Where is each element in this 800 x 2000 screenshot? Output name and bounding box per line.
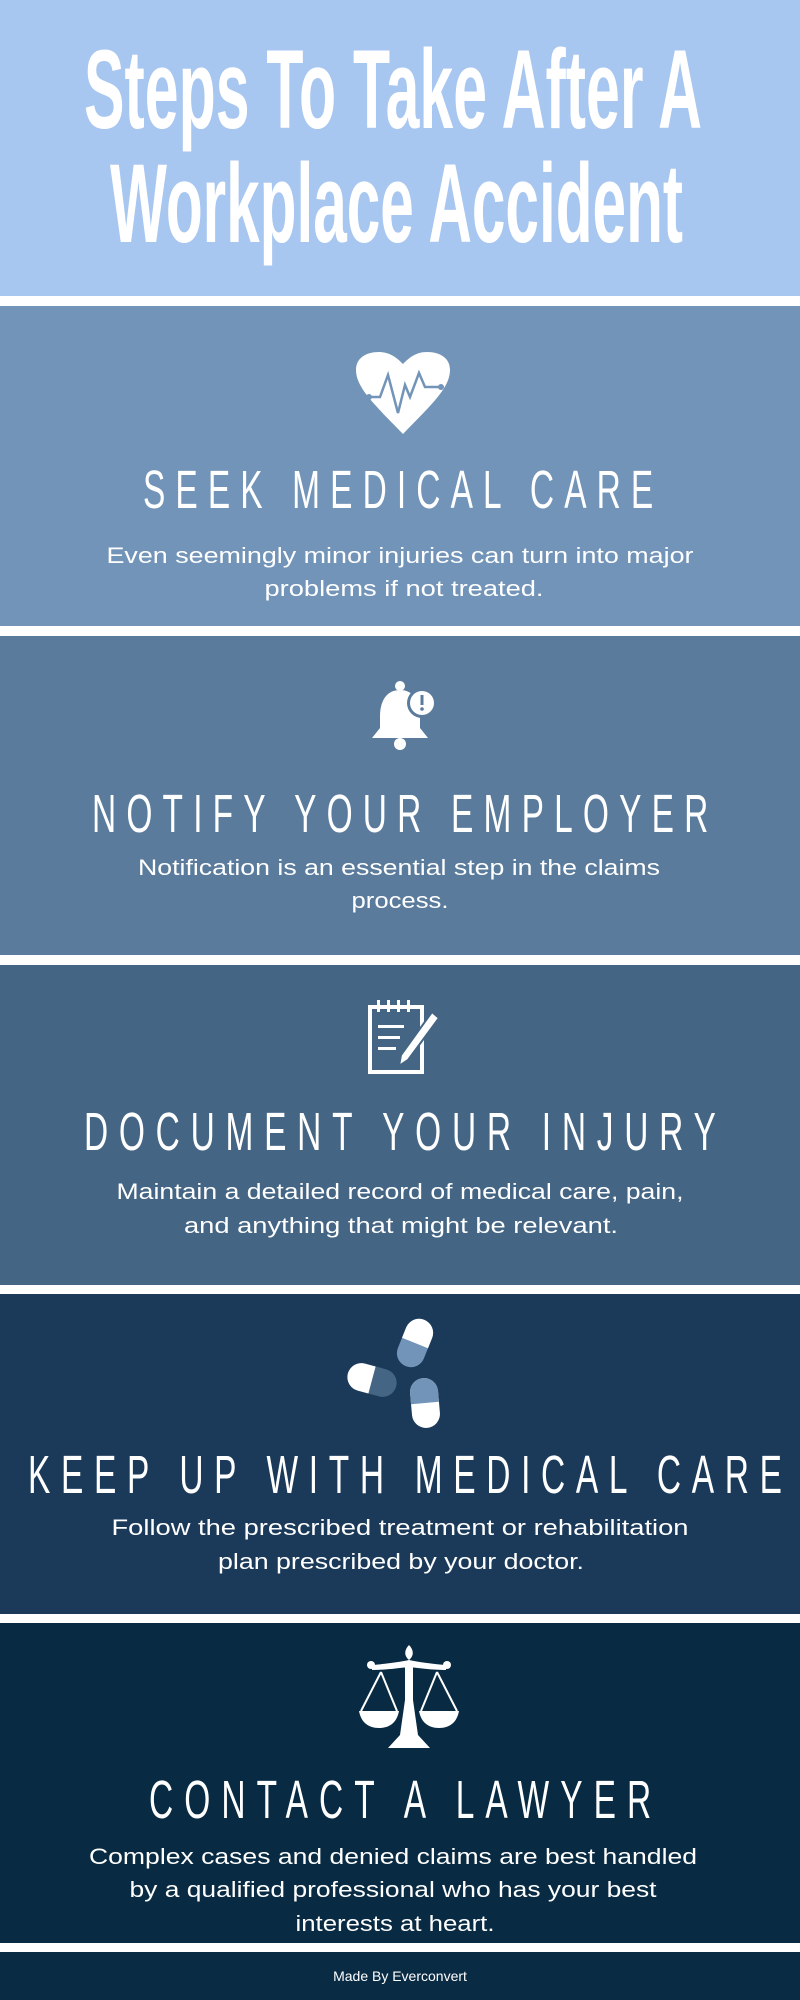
heading: CONTACT A LAWYER: [149, 1769, 651, 1830]
body text: Complex cases and denied claims are best handled: [89, 1844, 697, 1869]
body text: process.: [352, 888, 448, 913]
icon: heart with pulse: [356, 352, 450, 434]
footer: [0, 1952, 800, 2000]
body text: and anything that might be relevant.: [184, 1213, 618, 1238]
icon: pills: [344, 1315, 441, 1429]
icon: scales of justice: [359, 1645, 459, 1748]
icon: notepad with pencil: [370, 1000, 439, 1072]
panel: contact a lawyer: [0, 1623, 800, 1943]
body text: problems if not treated.: [264, 576, 544, 601]
heading: NOTIFY YOUR EMPLOYER: [92, 783, 708, 844]
title: [84, 27, 702, 266]
heading: SEEK MEDICAL CARE: [143, 459, 653, 520]
panel: notify your employer: [0, 636, 800, 955]
body text: interests at heart.: [296, 1911, 494, 1936]
body text: Maintain a detailed record of medical care, pain,: [116, 1179, 684, 1204]
body text: by a qualified professional who has your best: [130, 1877, 656, 1902]
heading: KEEP UP WITH MEDICAL CARE: [28, 1444, 782, 1505]
panel: seek medical care: [0, 306, 800, 626]
footer: Made By Everconvert: [333, 1968, 467, 1984]
body text: Follow the prescribed treatment or rehabilitation: [112, 1515, 688, 1540]
panel: keep up with medical care: [0, 1294, 800, 1614]
body text: [138, 855, 660, 913]
title band: [0, 0, 800, 296]
body text: Even seemingly minor injuries can turn into major: [106, 543, 694, 568]
panel: document your injury: [0, 965, 800, 1285]
body text: [116, 1179, 684, 1238]
body text: plan prescribed by your doctor.: [218, 1549, 584, 1574]
body text: [112, 1515, 688, 1574]
icon: bell with alert: [372, 681, 437, 750]
body text: [89, 1844, 697, 1936]
body text: Notification is an essential step in the claims: [138, 855, 660, 880]
body text: [106, 543, 694, 601]
heading: DOCUMENT YOUR INJURY: [84, 1101, 716, 1162]
